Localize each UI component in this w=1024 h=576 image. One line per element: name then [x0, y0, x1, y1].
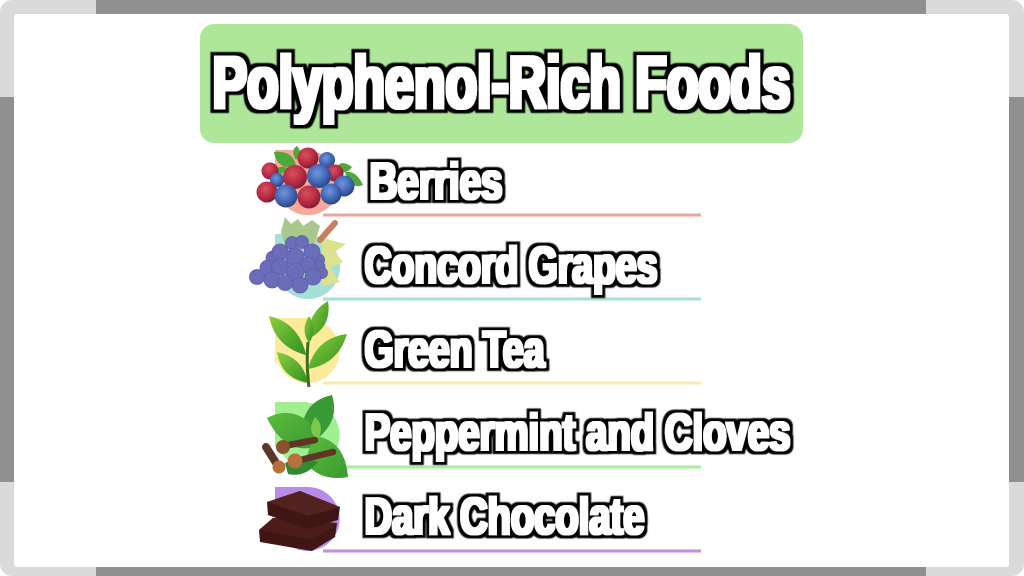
label: green tea: Green Tea: [364, 321, 545, 379]
title text: Polyphenol-Rich Foods: [212, 41, 790, 124]
underline: berries: [323, 214, 701, 216]
icon: peppermint and cloves: [266, 395, 348, 478]
row: dark chocolate: [259, 487, 701, 552]
row: concord grapes: [250, 217, 701, 300]
underline: grapes: [323, 298, 701, 300]
icon badge: peppermint: [275, 402, 340, 467]
icon badge: grapes: [275, 234, 340, 299]
icon: green tea: [269, 301, 347, 387]
label: berries: Berries: [370, 153, 502, 211]
icon: grapes: [250, 217, 346, 293]
row: green tea: [269, 301, 701, 387]
icon badge: chocolate: [275, 487, 340, 551]
icon badge: berries: [275, 150, 340, 215]
icon: dark chocolate: [259, 491, 340, 551]
title banner: [200, 24, 803, 143]
underline: chocolate: [323, 550, 701, 552]
icon badge: green tea: [275, 318, 340, 383]
row: peppermint and cloves: [266, 395, 790, 478]
underline: peppermint: [323, 466, 701, 468]
label: peppermint and cloves: Peppermint and Cloves: [364, 404, 790, 462]
underline: green tea: [323, 382, 701, 384]
label: dark chocolate: Dark Chocolate: [364, 488, 644, 546]
label: concord grapes: Concord Grapes: [364, 237, 658, 295]
icon: berries: [256, 146, 363, 208]
row: berries: [256, 146, 701, 216]
